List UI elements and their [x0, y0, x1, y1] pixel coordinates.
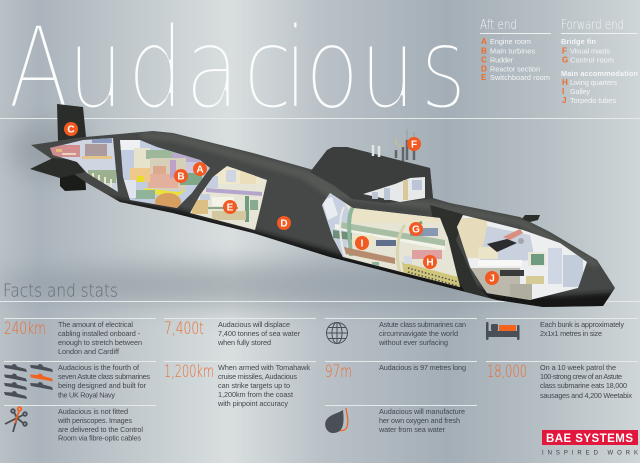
- legend: aft end: A: [481, 37, 487, 46]
- cutaway: forward section: [455, 214, 590, 304]
- label badges: J: [489, 274, 495, 284]
- legend: aft end: B: [481, 46, 487, 56]
- label badges: H: [426, 258, 434, 268]
- legend: aft end: Aft end: [480, 18, 517, 33]
- stat: periscopes: Room via fibre-optic cables: [58, 434, 141, 442]
- stat: circumnavigate: [326, 320, 466, 347]
- heading: facts and stats: Facts and stats: [3, 280, 118, 302]
- stat: displacement: when fully stored: [217, 338, 271, 347]
- cutaway: reactor and turbines: [120, 140, 210, 208]
- stat: bunk: 2x1x1 metres in size: [540, 329, 602, 338]
- stat: displacement: [164, 319, 301, 347]
- legend: forward end: Galley: [570, 87, 590, 96]
- stat: length: 97m: [325, 362, 352, 382]
- legend: forward end: Torpedo tubes: [570, 96, 616, 105]
- cutaway: accommodation: [322, 193, 460, 287]
- stat: food: On a 10 week patrol the: [540, 363, 616, 372]
- label badges: [64, 122, 499, 285]
- stat: periscopes: Audacious is not fitted: [58, 407, 128, 416]
- icon: fibre-optic cables: [5, 407, 27, 432]
- hull: [31, 131, 615, 307]
- label badges: C: [67, 124, 75, 136]
- stat: cabling: The amount of electrical: [58, 320, 133, 329]
- stat: cabling: [4, 319, 142, 356]
- legend: forward end: I: [562, 87, 564, 96]
- legend: forward end: F: [562, 46, 567, 56]
- stat: food: class submarine eats 18,000: [540, 381, 627, 390]
- stat: cabling: cabling installed onboard -: [58, 329, 141, 338]
- legend: forward end: G: [562, 56, 568, 64]
- stat: displacement: 7,400t: [164, 319, 204, 339]
- logo: BAE Systems: [542, 430, 638, 456]
- stat: seven submarines: Audacious is the fourth of: [58, 363, 140, 372]
- stat: displacement: 7,400 tonnes of sea water: [218, 329, 301, 338]
- icon: water drop: [325, 408, 348, 433]
- stat: food: sausages and 4,200 Weetabix: [540, 391, 632, 400]
- stat: seven submarines: seven Astute class submarines: [58, 372, 150, 381]
- stat: circumnavigate: circumnavigate the world: [379, 329, 458, 338]
- label badges: E: [227, 202, 234, 214]
- stat: range: 1,200km: [164, 362, 214, 382]
- logo: BAE Systems: BAE SYSTEMS: [546, 433, 633, 445]
- legend: aft end: Main turbines: [490, 46, 535, 56]
- icon: globe: [326, 322, 348, 344]
- stat: length: Audacious is 97 metres long: [379, 363, 466, 372]
- legend: aft end: Engine room: [490, 37, 531, 46]
- cutaway: switchboard room: [190, 166, 267, 230]
- label badges: G: [412, 224, 420, 236]
- tail fins: [57, 104, 86, 141]
- stat: displacement: Audacious will displace: [218, 320, 290, 329]
- stat: oxygen and water: water from sea water: [378, 425, 446, 434]
- legend: forward end: Main accommodation: [561, 69, 638, 78]
- label badges: A: [196, 164, 204, 176]
- stat: seven submarines: the UK Royal Navy: [58, 390, 115, 400]
- stat: oxygen and water: [325, 407, 465, 434]
- legend: aft end: [480, 18, 551, 82]
- stat: oxygen and water: Audacious will manufacture: [379, 407, 465, 416]
- stat: food: 18,000: [487, 362, 527, 382]
- stat: seven submarines: [4, 363, 150, 400]
- legend: forward end: Control room: [570, 56, 614, 64]
- submarine cutaway: [30, 104, 620, 315]
- title: Audacious: [8, 3, 467, 134]
- stat: bunk: Each bunk is approximately: [540, 320, 624, 329]
- stat: periscopes: [5, 407, 143, 442]
- stat: range: with pinpoint accuracy: [217, 399, 288, 408]
- legend: forward end: [561, 18, 638, 105]
- legend: forward end: Visual masts: [570, 46, 610, 56]
- stat: periscopes: with periscopes. Images: [57, 416, 132, 425]
- stat: circumnavigate: Astute class submarines can: [379, 320, 466, 329]
- legend: aft end: Switchboard room: [490, 73, 550, 82]
- stat: range: [164, 362, 310, 408]
- stat: range: can strike targets up to: [218, 381, 290, 390]
- stat: oxygen and water: her own oxygen and fresh: [379, 416, 460, 425]
- logo: BAE Systems: INSPIRED WORK: [542, 450, 638, 456]
- legend: forward end: Living quarters: [570, 78, 617, 87]
- stat: circumnavigate: without ever surfacing: [378, 338, 448, 347]
- masts: [373, 129, 414, 161]
- label badges: F: [411, 140, 417, 150]
- legend: forward end: J: [562, 96, 566, 105]
- stat: range: When armed with Tomahawk: [218, 363, 310, 372]
- stat: length: [325, 362, 466, 382]
- legend: aft end: C: [481, 56, 487, 64]
- legend: aft end: D: [481, 64, 487, 74]
- cutaway: aft section: [50, 138, 118, 192]
- stat: food: 100-strong crew of an Astute: [540, 372, 622, 381]
- icon: bed: [486, 322, 520, 340]
- stat: cabling: London and Cardiff: [58, 347, 120, 356]
- stat: food: [487, 362, 632, 400]
- legend: aft end: Reactor section: [490, 64, 540, 74]
- legend: forward end: Forward end: [561, 18, 624, 33]
- section rules: [4, 318, 638, 406]
- legend: forward end: Bridge fin: [561, 37, 596, 46]
- label badges: D: [280, 218, 288, 230]
- stat: cabling: 240km: [4, 319, 46, 339]
- stat: cabling: enough to stretch between: [58, 338, 142, 347]
- icon: submarines: [4, 364, 53, 399]
- stat: range: 1,200km from the coast: [218, 390, 293, 399]
- legend: aft end: E: [481, 73, 487, 82]
- stat: periscopes: are delivered to the Control: [58, 425, 143, 434]
- label badges: I: [361, 238, 364, 250]
- stat: seven submarines: being designed and built for: [58, 381, 147, 390]
- stat: bunk: [486, 320, 624, 340]
- stat: range: cruise missiles, Audacious: [218, 372, 297, 381]
- label badges: B: [177, 172, 185, 182]
- legend: forward end: H: [562, 78, 568, 87]
- legend: aft end: Rudder: [490, 56, 514, 64]
- cutaway: bridge fin window: [363, 177, 425, 202]
